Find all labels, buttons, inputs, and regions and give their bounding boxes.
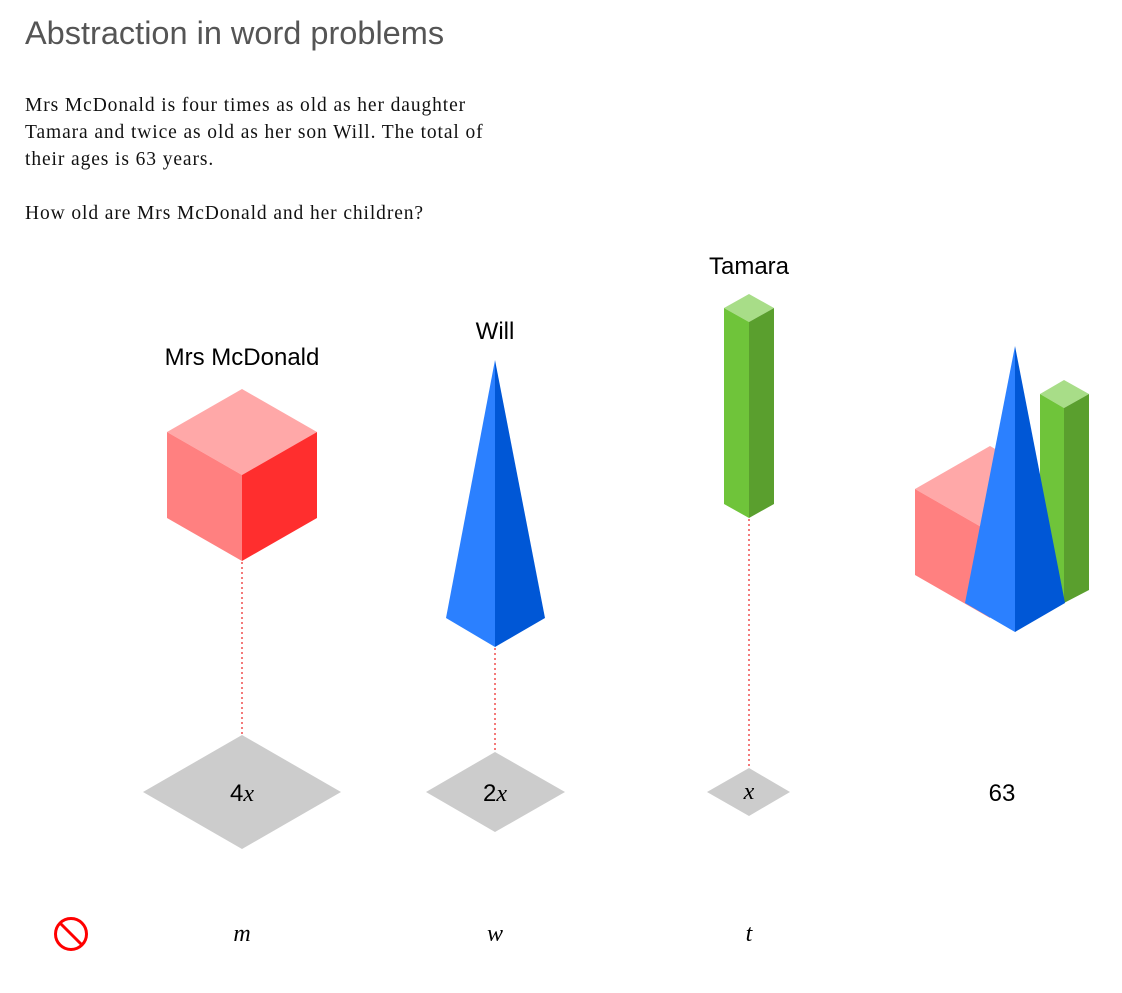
variable t: t — [746, 921, 754, 947]
icon: red cube — [167, 389, 317, 561]
variable m: m — [233, 921, 251, 947]
icon: green bar — [724, 294, 774, 518]
diamond x — [707, 768, 790, 816]
diamond 2x — [426, 752, 565, 832]
dotted connectors — [242, 519, 749, 776]
variable w: w — [487, 921, 503, 947]
label: Tamara: Tamara — [709, 253, 790, 280]
diamond x: x — [743, 779, 755, 805]
diamond 4x: 4x — [230, 780, 254, 807]
icon: blue pyramid — [446, 360, 545, 647]
problem text: Tamara and twice as old as her son Will. The total of — [25, 122, 484, 143]
label: Will: Will — [476, 318, 514, 345]
problem text: Mrs McDonald is four times as old as her daughter — [25, 95, 466, 116]
problem text — [25, 95, 484, 224]
title: Abstraction in word problems — [25, 15, 444, 51]
problem text: How old are Mrs McDonald and her children? — [25, 203, 424, 224]
diamond 4x — [143, 735, 341, 849]
icon: prohibited — [56, 918, 86, 950]
label: Mrs McDonald: Mrs McDonald — [165, 344, 319, 371]
combined shape — [915, 346, 1089, 632]
diamond 2x: 2x — [483, 780, 507, 807]
problem text: their ages is 63 years. — [25, 149, 214, 170]
total 63: 63 — [989, 780, 1015, 807]
